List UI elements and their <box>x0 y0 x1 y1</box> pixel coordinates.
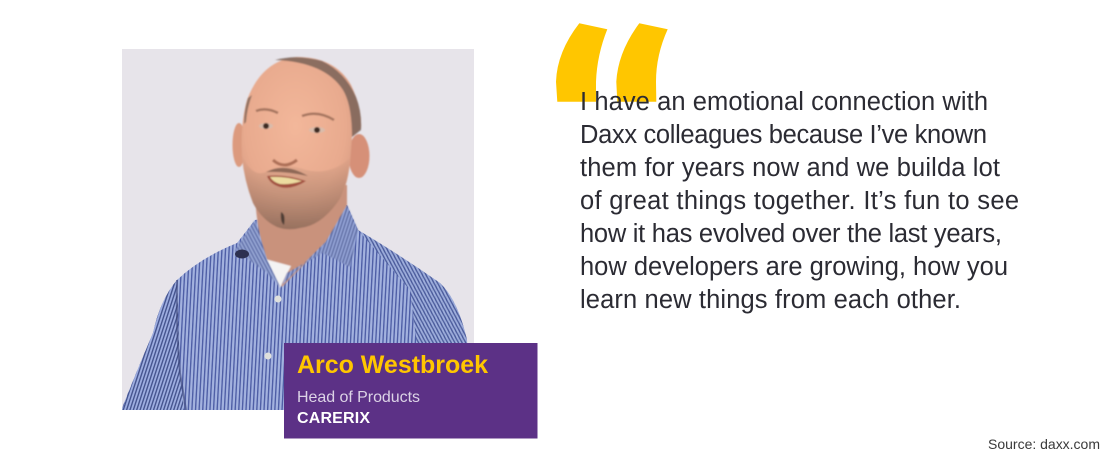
ears <box>232 123 246 167</box>
quote text: of great things together. It’s fun to see <box>580 187 1019 215</box>
job title: Head of Products <box>297 389 420 406</box>
quote text: I have an emotional connection with <box>580 88 988 116</box>
name card <box>284 343 538 438</box>
neck <box>255 185 347 287</box>
goatee <box>281 212 285 225</box>
quote text: how developers are growing, how you <box>580 253 1008 281</box>
quote text: them for years now and we builda lot <box>580 154 1000 182</box>
brows <box>256 109 278 113</box>
name: Arco Westbroek <box>297 351 488 379</box>
source credit: Source: daxx.com <box>988 436 1100 452</box>
undershirt <box>265 259 291 288</box>
shirt buttons <box>264 296 282 360</box>
head and neck group <box>232 57 370 288</box>
head <box>242 57 361 229</box>
quote text: Daxx colleagues because I’ve known <box>580 121 987 149</box>
right shoulder <box>358 230 468 343</box>
collar <box>235 205 358 287</box>
icon: quotation mark <box>556 23 668 102</box>
moustache <box>266 168 308 176</box>
hair edge <box>275 57 361 137</box>
left sleeve <box>122 280 184 410</box>
stubble <box>244 164 348 230</box>
mouth <box>267 176 306 188</box>
nose <box>273 160 297 165</box>
eyes <box>259 123 273 129</box>
shirt body <box>122 205 470 410</box>
quote text: how it has evolved over the last years, <box>580 220 1002 248</box>
company: CARERIX <box>297 410 370 427</box>
quote text: learn new things from each other. <box>580 286 961 314</box>
portrait photo <box>122 49 474 410</box>
quote text <box>580 88 1019 314</box>
